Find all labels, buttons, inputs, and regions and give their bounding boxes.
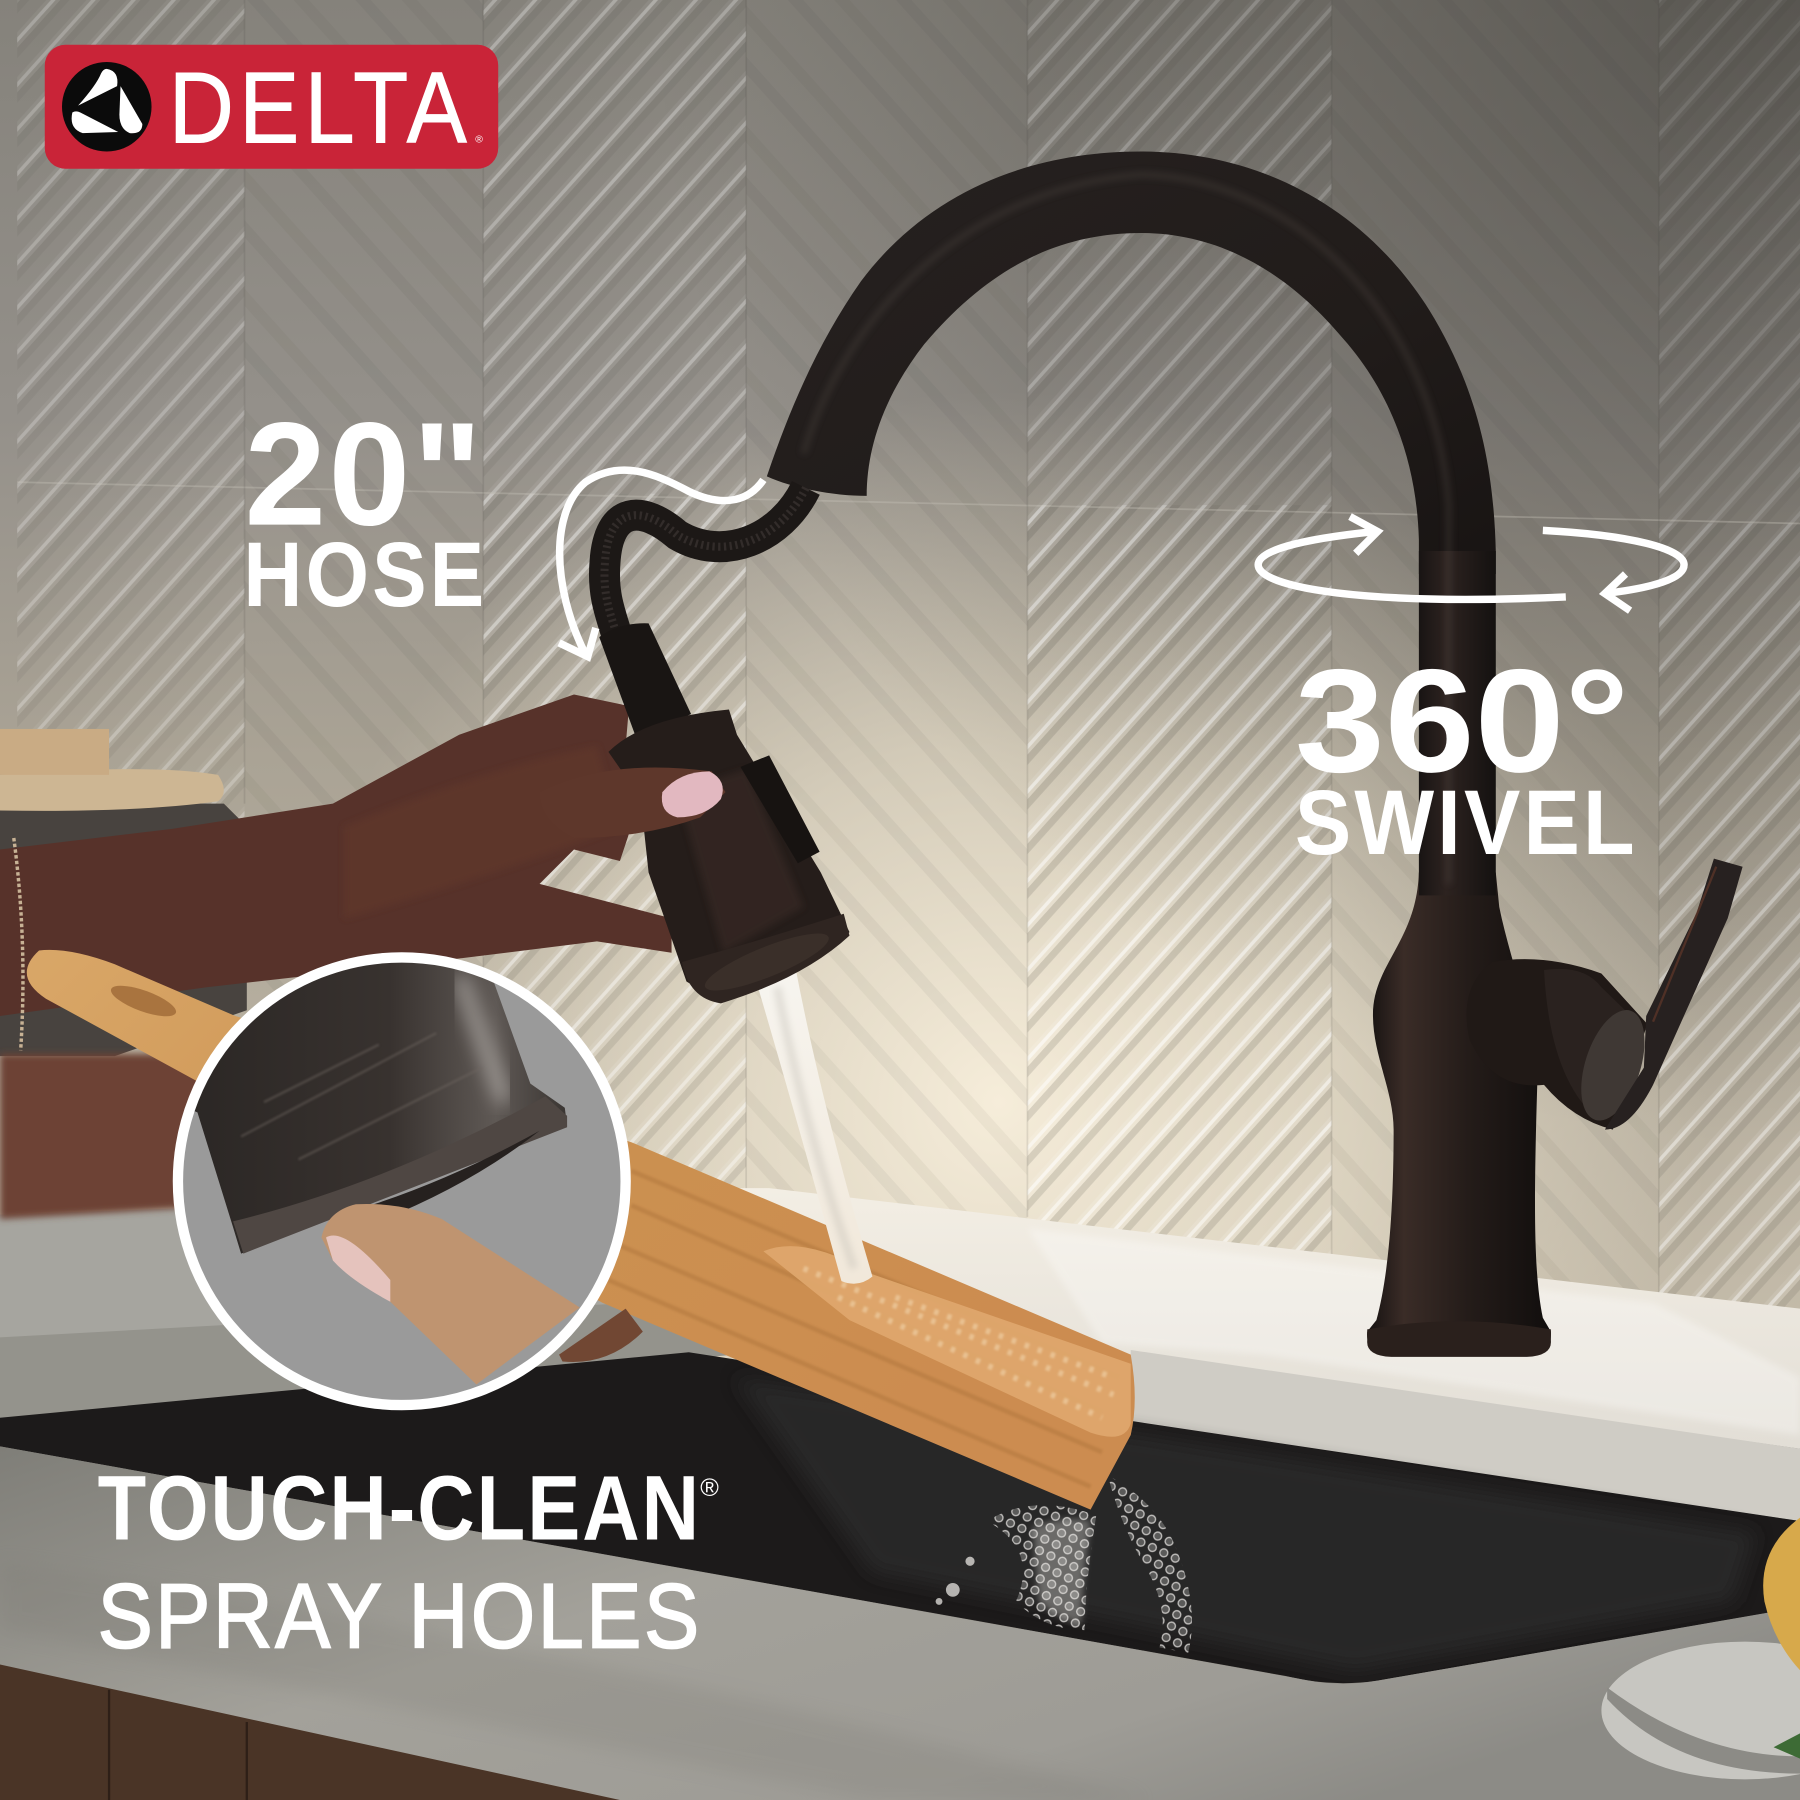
faucet body — [1367, 872, 1551, 1356]
pull-down hose — [604, 488, 806, 634]
inset spray head — [194, 962, 566, 1254]
spray head body — [608, 709, 849, 1002]
logo wordmark: DELTA — [169, 52, 472, 164]
bracelet — [14, 838, 23, 1050]
spray head neck — [599, 623, 691, 740]
water stream — [752, 959, 872, 1284]
spray holes label: SPRAY HOLES — [98, 1564, 702, 1667]
swivel figure: 360° — [1295, 638, 1629, 803]
spray head rim — [682, 914, 849, 1003]
hose label: HOSE — [243, 524, 487, 626]
spout arc — [767, 152, 1496, 574]
touch-clean label: TOUCH-CLEAN — [98, 1457, 701, 1560]
water splash — [936, 1475, 1192, 1653]
finger behind inset — [559, 1309, 643, 1362]
callout: 360 degree swivel — [1295, 638, 1638, 874]
zoom inset: touch-clean spray holes — [172, 941, 626, 1405]
handle cylinder — [1467, 959, 1647, 1130]
wall tiles background — [0, 0, 1800, 1378]
plate and fruit — [1601, 1518, 1800, 1779]
Delta logo badge — [45, 45, 498, 169]
spray head button — [740, 755, 820, 863]
registered mark: ® — [700, 1474, 719, 1502]
logo emblem — [62, 62, 152, 152]
wooden utensil — [27, 950, 1135, 1510]
callout: touch-clean spray holes — [98, 1457, 719, 1667]
countertop — [0, 1188, 1800, 1521]
callout: 20 inch hose — [243, 393, 487, 626]
hose length figure: 20" — [245, 393, 484, 557]
base ring — [1367, 1321, 1551, 1357]
registered mark: ® — [475, 134, 483, 145]
handle cap — [1569, 1002, 1657, 1128]
faucet — [767, 152, 1743, 1357]
arrow: swivel rotation — [1258, 517, 1684, 611]
sink basin — [0, 1352, 1800, 1683]
pot with wooden lid — [0, 729, 247, 1056]
faucet neck — [1419, 551, 1496, 895]
hand holding sprayer — [0, 695, 672, 1050]
lower arm — [0, 1054, 230, 1219]
arrow: hose extension — [559, 470, 763, 657]
inset finger — [321, 1204, 580, 1384]
thumbnail — [662, 771, 723, 817]
inset fingernail — [326, 1235, 390, 1302]
front counter and cabinet — [0, 1446, 1800, 1800]
swivel label: SWIVEL — [1295, 771, 1638, 874]
thumb over sprayer — [540, 767, 726, 838]
lever — [1605, 859, 1743, 1130]
spray head — [599, 623, 849, 1003]
wet surface — [763, 1246, 1131, 1437]
